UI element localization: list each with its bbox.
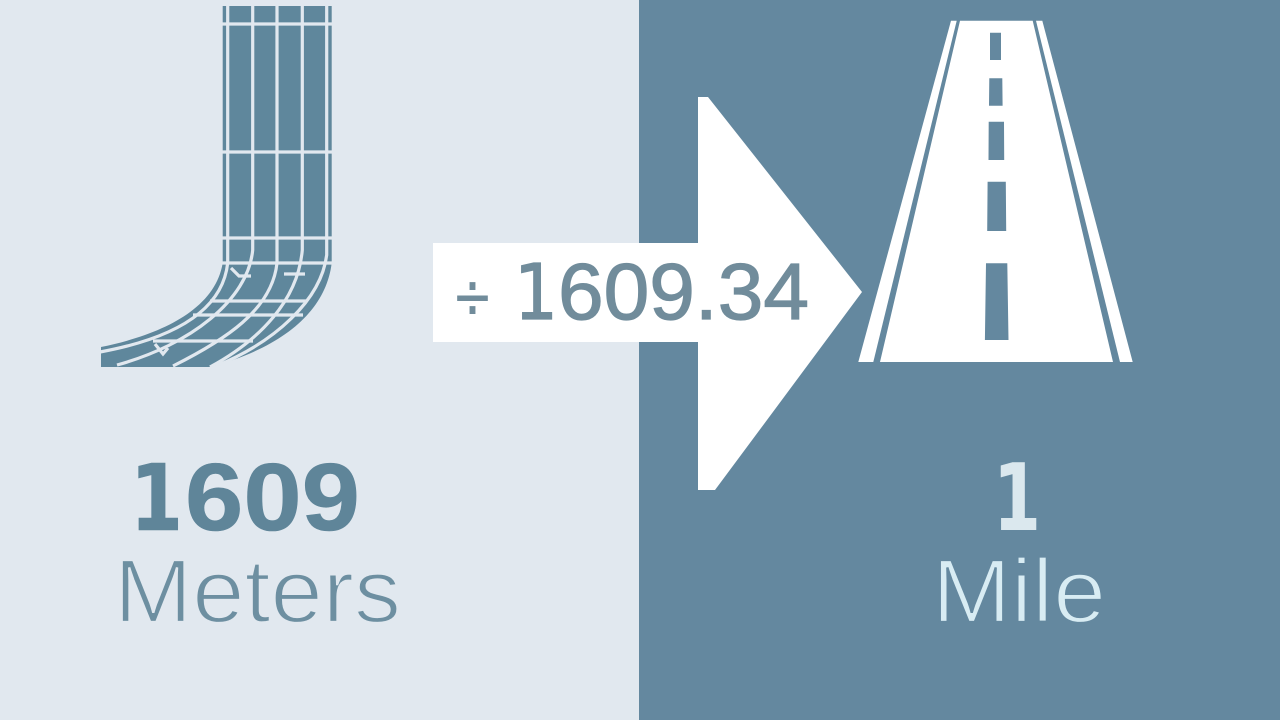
text: 1609: 609 [185, 444, 360, 551]
text: Meters: Meters [114, 542, 401, 642]
panel: meters background [0, 0, 639, 720]
divisor value: 1 [514, 249, 558, 338]
panel: mile background [639, 0, 1280, 720]
track grid lines [100, 6, 336, 367]
text: 1: 1 [993, 444, 1041, 552]
divisor value: 609.34 [558, 247, 809, 336]
road surface with dashes [880, 21, 1113, 362]
text: division factor [452, 247, 809, 338]
icon: road [858, 21, 1133, 362]
division sign: ÷ [452, 258, 493, 335]
track shape [101, 6, 332, 367]
text: 1609: 1 [130, 445, 183, 552]
left road edge [858, 21, 957, 362]
right road edge [1036, 21, 1133, 362]
arrow: conversion arrow [433, 97, 862, 490]
text: Mile: Mile [932, 542, 1106, 642]
icon: curved track grid [100, 6, 336, 367]
